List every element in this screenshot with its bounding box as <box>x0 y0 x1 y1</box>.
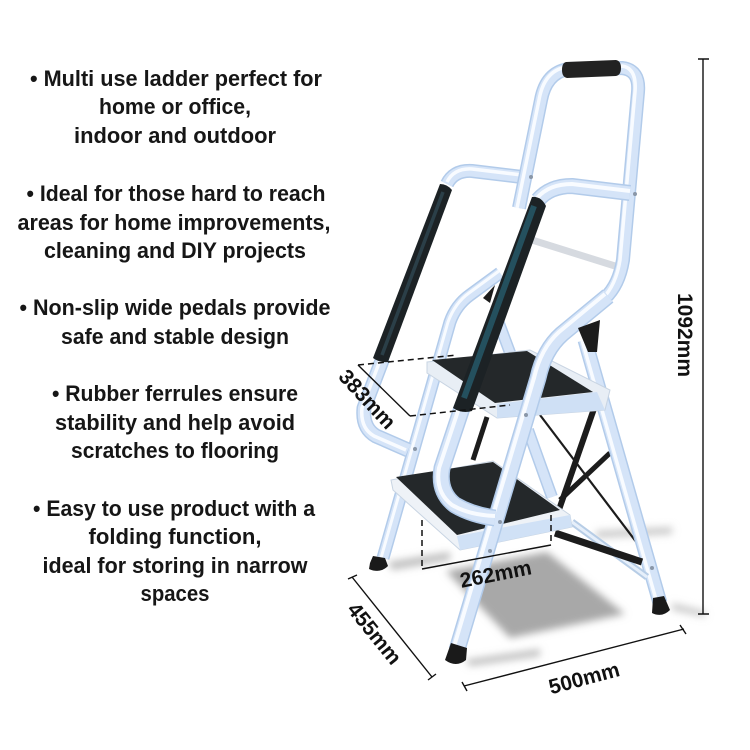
bullet: multi use: home or office, <box>99 94 251 119</box>
black cross braces <box>473 400 637 543</box>
dimension: width 500mm <box>462 625 686 699</box>
top handle grip <box>562 60 621 78</box>
bullet: non-slip pedals: safe and stable design <box>61 324 289 349</box>
bullet: hard to reach areas: • Ideal for those hard to reach <box>26 181 326 206</box>
floor shadows <box>388 527 705 666</box>
bullet: rubber ferrules <box>52 381 298 463</box>
lower step <box>391 461 572 550</box>
rear inner leg <box>497 318 552 497</box>
rear right leg <box>582 340 660 603</box>
dimension: step depth 383mm <box>334 355 510 434</box>
dimension: depth 455mm: 455mm <box>342 599 406 669</box>
dimension: step width 262mm <box>422 515 551 593</box>
bullet: hard to reach areas: areas for home improvements, <box>18 210 330 235</box>
right arm foam grip <box>453 197 546 412</box>
frame screws <box>413 175 654 570</box>
bullet: hard to reach areas <box>18 181 330 263</box>
left arm tube <box>362 169 522 450</box>
bullet: rubber ferrules: stability and help avoid <box>55 410 295 435</box>
bullet: multi use <box>30 66 322 148</box>
step ladder illustration <box>362 60 670 664</box>
dimension: step depth 383mm: 383mm <box>334 365 400 434</box>
bullet: folding function <box>33 496 316 606</box>
dimension: width 500mm: 500mm <box>546 658 622 699</box>
bottom tube and lower brace <box>555 522 647 577</box>
bullet: rubber ferrules: • Rubber ferrules ensure <box>52 381 298 406</box>
back handle cross bar <box>532 240 615 266</box>
bullet: multi use: • Multi use ladder perfect for <box>30 66 322 91</box>
bullet: hard to reach areas: cleaning and DIY projects <box>44 238 306 263</box>
bullet: non-slip pedals <box>20 295 330 349</box>
rubber feet <box>369 556 670 664</box>
back handle frame <box>517 66 638 298</box>
feature list text <box>18 66 330 606</box>
bullet: folding function: ideal for storing in narrow <box>42 553 308 578</box>
rear left frame <box>381 271 500 558</box>
bullet: folding function: folding function, <box>88 524 262 549</box>
bullet: multi use: indoor and outdoor <box>74 123 276 148</box>
bullet: rubber ferrules: scratches to flooring <box>71 438 279 463</box>
bullet: non-slip pedals: • Non-slip wide pedals provide <box>20 295 330 320</box>
dimension: height 1092mm: 1092mm <box>673 293 696 377</box>
dimension: depth 455mm <box>342 575 436 680</box>
upper step <box>427 350 610 418</box>
front leg frame <box>453 294 608 650</box>
right arm tube <box>438 184 630 518</box>
hinge bracket left <box>483 285 495 303</box>
bullet: folding function: spaces <box>140 581 210 606</box>
bullet: folding function: • Easy to use product with a <box>33 496 316 521</box>
dimension: step width 262mm: 262mm <box>458 556 533 593</box>
left arm foam grip <box>373 184 452 362</box>
dimension: height 1092mm <box>673 59 709 614</box>
hinge bracket <box>578 320 600 352</box>
